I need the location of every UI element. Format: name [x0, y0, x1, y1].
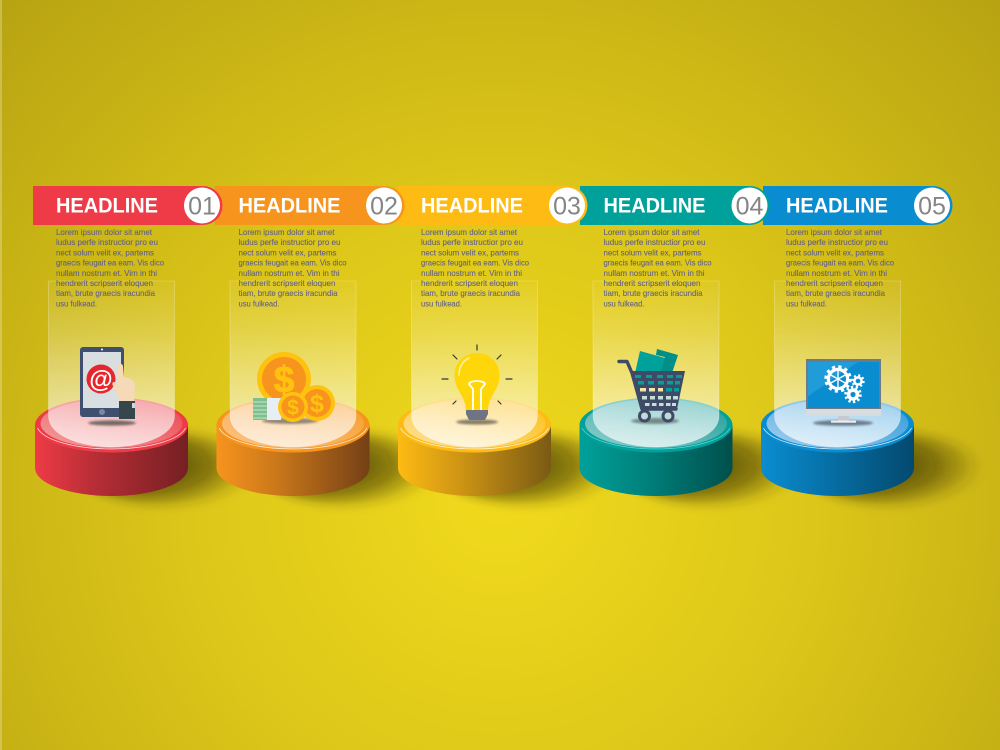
body text 4: [604, 227, 712, 308]
body text 5: nullam nostrum et. Vim in thi: [786, 268, 887, 278]
body text 4: nect solum velit ex, partems: [604, 247, 702, 257]
body text 3: usu fulkead.: [421, 298, 462, 308]
body text 2: nect solum velit ex, partems: [238, 247, 336, 257]
icon: monitor with gears: [806, 359, 881, 426]
body text 5: graecis feugait ea eam. Vis dico: [786, 258, 894, 268]
banner 4: teal: 04: [736, 192, 763, 220]
body text 1: hendrerit scripserit eloquen: [56, 278, 153, 288]
banner 3: yellow: [398, 186, 588, 225]
banner 3: yellow: 03: [553, 192, 581, 220]
body text 3: hendrerit scripserit eloquen: [421, 278, 518, 288]
body text 4: graecis feugait ea eam. Vis dico: [604, 258, 712, 268]
column 3: yellow podium: [398, 281, 551, 496]
icon: dollar coins and banknotes: [253, 352, 335, 424]
column 1: red podium: [35, 281, 188, 496]
body text 2: tiam, brute graecis iracundia: [238, 288, 338, 298]
body text 3: nect solum velit ex, partems: [421, 247, 519, 257]
body text 1: usu fulkead.: [56, 298, 97, 308]
banner 5: blue: HEADLINE: [786, 194, 888, 218]
body text 2: hendrerit scripserit eloquen: [238, 278, 336, 288]
icon: light bulb: [442, 345, 512, 425]
banner 2: orange: 02: [370, 192, 398, 220]
column 4: teal podium: [580, 281, 732, 496]
body text 2: Lorem ipsum dolor sit amet: [238, 227, 335, 237]
body text 5: [786, 227, 894, 308]
body text 1: tiam, brute graecis iracundia: [56, 288, 155, 298]
banner 1: red: [33, 186, 222, 225]
body text 3: Lorem ipsum dolor sit amet: [421, 227, 518, 237]
body text 3: ludus perfe instructior pro eu: [421, 237, 523, 247]
body text 4: Lorem ipsum dolor sit amet: [604, 227, 700, 237]
body text 4: usu fulkead.: [604, 298, 644, 308]
banner 5: blue: [763, 186, 952, 225]
body text 2: nullam nostrum et. Vim in thi: [238, 268, 340, 278]
icon: shopping cart: [619, 349, 685, 424]
banner 2: orange: [215, 186, 404, 225]
column 5: blue podium: [761, 281, 914, 496]
body text 5: ludus perfe instructior pro eu: [786, 237, 888, 247]
body text 5: nect solum velit ex, partems: [786, 247, 884, 257]
body text 4: hendrerit scripserit eloquen: [604, 278, 701, 288]
body text 5: usu fulkead.: [786, 298, 827, 308]
body text 5: Lorem ipsum dolor sit amet: [786, 227, 883, 237]
body text 4: nullam nostrum et. Vim in thi: [604, 268, 705, 278]
body text 3: [421, 227, 529, 308]
body text 2: graecis feugait ea eam. Vis dico: [238, 258, 347, 268]
icon: tablet with at sign and hand: [80, 347, 136, 426]
body text 1: Lorem ipsum dolor sit amet: [56, 227, 153, 237]
icon: dollar coins and banknotes: $: [274, 359, 295, 400]
banner 2: orange: HEADLINE: [238, 194, 340, 218]
body text 2: [238, 227, 347, 308]
banner 1: red: HEADLINE: [56, 194, 158, 218]
body text 5: hendrerit scripserit eloquen: [786, 278, 883, 288]
body text 1: nect solum velit ex, partems: [56, 247, 154, 257]
banner 4: teal: [580, 186, 770, 225]
disc shadows: [80, 433, 982, 505]
banner 5: blue: 05: [918, 192, 946, 220]
icon: dollar coins and banknotes: $: [287, 396, 299, 420]
banner 4: teal: HEADLINE: [604, 194, 706, 218]
body text 1: nullam nostrum et. Vim in thi: [56, 268, 157, 278]
column 2: orange podium: [216, 281, 370, 496]
icon: tablet with at sign and hand: @: [89, 366, 113, 394]
body text 3: tiam, brute graecis iracundia: [421, 288, 520, 298]
body text 1: [56, 227, 164, 308]
body text 1: ludus perfe instructior pro eu: [56, 237, 158, 247]
icon: dollar coins and banknotes: $: [310, 390, 324, 418]
body text 3: nullam nostrum et. Vim in thi: [421, 268, 522, 278]
body text 5: tiam, brute graecis iracundia: [786, 288, 885, 298]
body text 3: graecis feugait ea eam. Vis dico: [421, 258, 529, 268]
banner 3: yellow: HEADLINE: [421, 194, 523, 218]
body text 2: ludus perfe instructior pro eu: [238, 237, 341, 247]
body text 4: tiam, brute graecis iracundia: [604, 288, 703, 298]
body text 2: usu fulkead.: [238, 298, 280, 308]
body text 1: graecis feugait ea eam. Vis dico: [56, 258, 164, 268]
banner 1: red: 01: [188, 192, 216, 220]
body text 4: ludus perfe instructior pro eu: [604, 237, 706, 247]
